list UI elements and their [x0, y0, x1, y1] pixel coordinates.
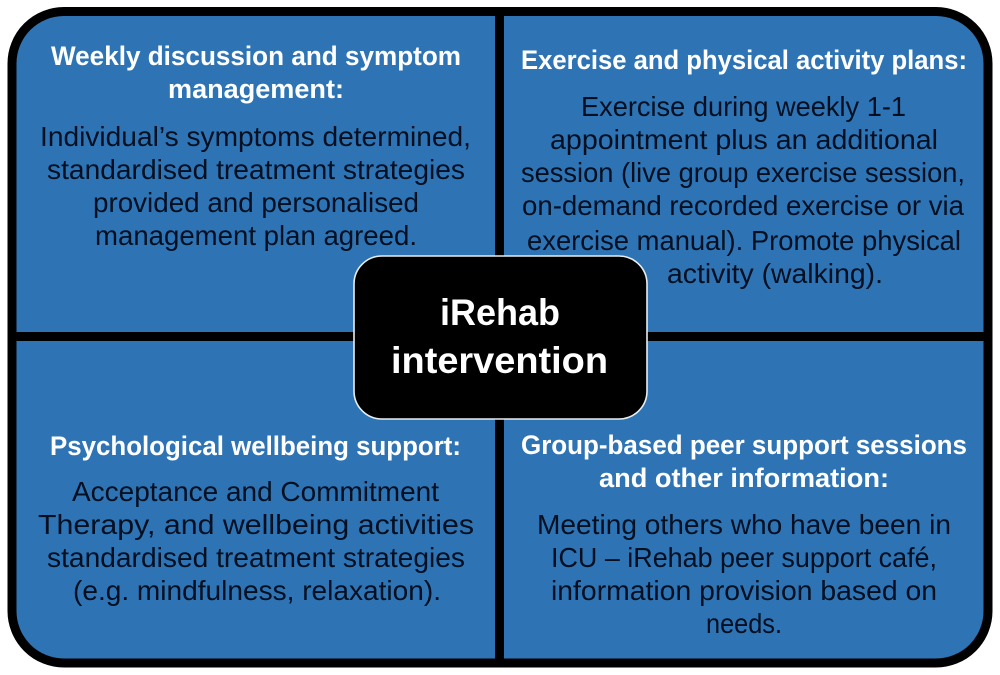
heading: psychological wellbeing: Psychological wellbeing support: — [50, 431, 461, 461]
text block: psychological body: Therapy, and wellbeing activities — [38, 509, 474, 540]
text block: weekly discussion body — [40, 121, 471, 251]
heading: exercise plans: Exercise and physical activity plans: — [521, 45, 967, 75]
center box: iRehab intervention: iRehab — [440, 292, 560, 333]
heading: group-based peer support: and other information: — [599, 463, 889, 493]
text block: psychological body: Acceptance and Commitment — [72, 476, 439, 507]
text block: psychological body: standardised treatment strategies — [47, 542, 465, 573]
heading: weekly discussion: Weekly discussion and symptom — [51, 41, 461, 71]
text block: peer support body — [537, 509, 951, 639]
text block: weekly discussion body: management plan agreed. — [95, 220, 417, 251]
heading: weekly discussion — [51, 41, 461, 104]
text block: weekly discussion body: standardised treatment strategies — [47, 154, 465, 185]
text block: peer support body: needs. — [706, 608, 782, 639]
text block: exercise body: activity (walking). — [667, 258, 883, 289]
text block: psychological body — [38, 476, 474, 606]
heading: group-based peer support — [521, 430, 967, 493]
text block: exercise body: session (live group exercise session, — [521, 157, 965, 188]
heading: weekly discussion: management: — [168, 74, 344, 104]
text block: peer support body: Meeting others who have been in — [537, 509, 951, 540]
center box: iRehab intervention — [354, 256, 647, 419]
text block: exercise body: on-demand recorded exercise or via — [522, 190, 964, 221]
text block: psychological body: (e.g. mindfulness, relaxation). — [73, 575, 441, 606]
text block: exercise body — [521, 91, 965, 289]
panel: psychological wellbeing support — [38, 431, 474, 606]
panel: weekly discussion and symptom management — [40, 41, 471, 251]
center box: iRehab intervention: intervention — [391, 340, 608, 381]
text block: exercise body: appointment plus an additional — [550, 124, 938, 155]
panel: group-based peer support — [521, 430, 967, 639]
panel: exercise and physical activity plans — [521, 45, 967, 289]
text block: exercise body: Exercise during weekly 1-1 — [581, 91, 906, 122]
text block: peer support body: information provision based on — [551, 575, 937, 606]
text block: weekly discussion body: Individual’s symptoms determined, — [40, 121, 471, 152]
text block: peer support body: ICU – iRehab peer support café, — [551, 542, 937, 573]
heading: group-based peer support: Group-based peer support sessions — [521, 430, 967, 460]
text block: exercise body: exercise manual). Promote physical — [527, 225, 961, 256]
text block: weekly discussion body: provided and personalised — [93, 187, 419, 218]
